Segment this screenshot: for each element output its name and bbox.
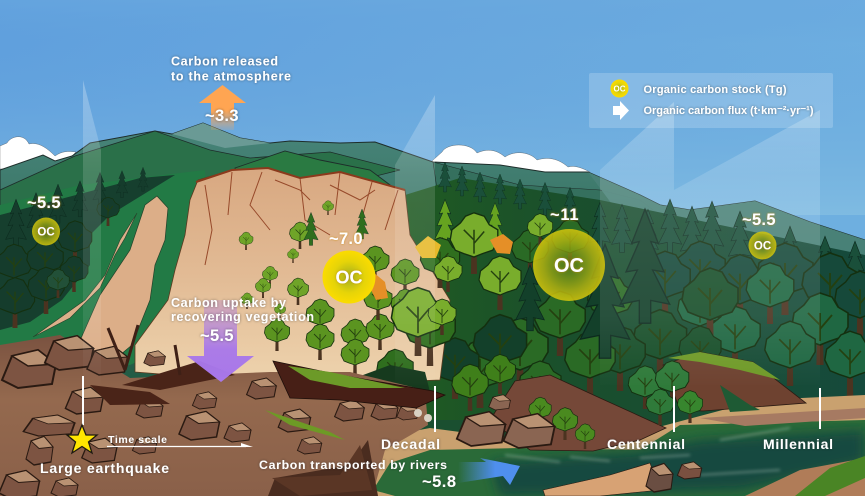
stock marker: centennial [533,206,605,301]
landslide scarp [33,168,450,385]
legend icon: organic carbon stock: OC [614,84,626,94]
right-hand forest [405,162,865,420]
value: uptake flux: ~5.5 [200,327,234,345]
stock marker: decadal [322,230,376,304]
label: large earthquake: Large earthquake [40,460,169,476]
clouds [0,137,590,190]
label: decadal: Decadal [381,436,440,452]
legend label: flux: Organic carbon flux (t·km⁻²·yr⁻¹) [644,105,814,117]
label: carbon uptake: Carbon uptake by [171,296,286,310]
stock marker: centennial: ~11 [550,206,578,224]
legend icon: flux arrow [613,101,629,120]
label: river transport: Carbon transported by rivers [259,458,447,472]
arrow: carbon uptake [187,300,254,382]
label: millennial: Millennial [763,436,833,452]
stock marker: millennial [742,211,776,260]
recovering deciduous trees [239,201,553,396]
stock marker: millennial: ~5.5 [742,211,776,229]
river and banks [340,395,865,496]
value: atmosphere flux: ~3.3 [205,107,238,125]
time scale axis [67,376,820,453]
heading: carbon released: to the atmosphere [171,70,291,84]
mountain ridges [0,123,865,496]
stock marker: earthquake time: ~5.5 [27,194,60,212]
stock marker: decadal: OC [336,268,363,288]
stock marker: centennial: OC [554,255,584,277]
debris field [0,325,445,496]
legend [589,73,833,128]
sky background [0,0,865,300]
label: time scale: Time scale [108,434,167,446]
stock marker: earthquake time [27,194,60,246]
light beams marking time periods [83,80,820,385]
eroded earth mounds [452,352,806,451]
left hillside forest [0,167,205,365]
label: carbon uptake: recovering vegetation [171,310,314,324]
label: centennial: Centennial [607,436,685,452]
arrow: release to atmosphere [199,85,246,130]
arrow: river transport [458,458,520,485]
heading: carbon released: Carbon released [171,54,278,68]
stock marker: earthquake time: OC [37,226,55,238]
icon: earthquake star [67,425,97,453]
legend label: stock: Organic carbon stock (Tg) [644,84,787,96]
value: river flux: ~5.8 [422,473,456,491]
stock marker: decadal: ~7.0 [329,230,362,248]
stock marker: millennial: OC [754,240,771,252]
legend icon: organic carbon stock [610,80,628,98]
